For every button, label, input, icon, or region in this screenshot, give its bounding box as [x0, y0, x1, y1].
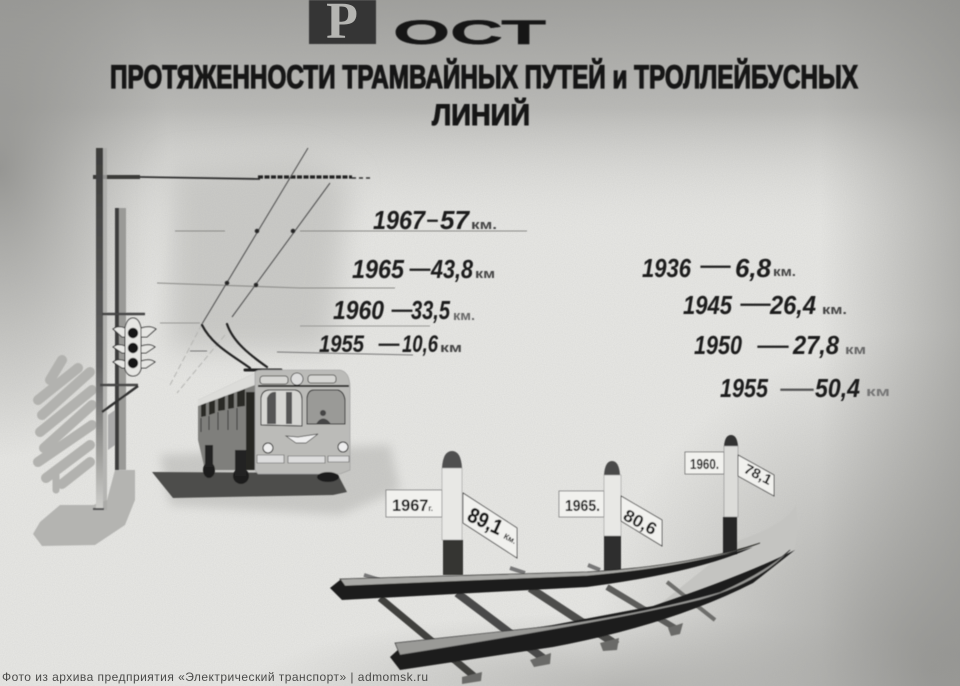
1945 value	[683, 290, 847, 320]
illustration: rails	[330, 543, 795, 670]
lower rail	[390, 550, 795, 670]
illustration: railway ties	[364, 505, 797, 684]
title word: ОСТ	[393, 14, 546, 52]
1955 value	[319, 331, 462, 358]
1960 value: 33,5	[411, 295, 450, 325]
1945 value: 1945	[683, 290, 732, 320]
bus grille and headlights	[286, 434, 318, 443]
1936 value: 1936	[642, 253, 691, 283]
wheels	[203, 462, 215, 478]
data list: trolleybus lines	[319, 205, 497, 358]
trolley poles	[202, 324, 281, 370]
1960 value: 1960	[333, 295, 384, 325]
1965 value: 1965	[352, 254, 404, 284]
bus front	[255, 370, 350, 474]
1967 value: 57	[440, 205, 471, 235]
upper rail	[330, 543, 760, 600]
1945 value: 26,4	[769, 290, 816, 320]
milepost 1960: 1960.	[690, 456, 719, 473]
1965 value: —	[410, 261, 430, 278]
1936 value	[642, 253, 796, 283]
side windows	[201, 389, 245, 417]
milepost 1960	[685, 435, 775, 554]
1960 value: —	[392, 302, 412, 319]
1967 value	[373, 205, 497, 235]
bus side	[198, 373, 258, 470]
mileposts	[386, 435, 775, 575]
1950 value: 27,8	[792, 330, 839, 360]
illustration: trolleybus	[152, 324, 350, 498]
windscreen	[261, 390, 302, 426]
1950 value	[694, 330, 866, 360]
1960 value	[333, 295, 475, 325]
1967 value: –	[427, 212, 438, 229]
milepost 1960: 78,1	[742, 460, 775, 488]
1950 value: км	[845, 342, 866, 357]
milepost 1967: Км.	[502, 532, 518, 546]
illustration: poles	[93, 148, 145, 510]
title	[110, 0, 858, 132]
milepost 1967: 1967г.	[392, 496, 433, 515]
illustration: overhead wires	[93, 148, 527, 393]
icon: traffic light	[113, 318, 156, 376]
title initial letter block	[309, 0, 376, 50]
1950 value: 1950	[694, 330, 742, 360]
subtitle line two: ЛИНИЙ	[432, 98, 530, 132]
1945 value: —	[741, 296, 770, 313]
1945 value: км.	[822, 302, 847, 317]
milepost 1967: 89,1	[464, 504, 506, 540]
1967 value: 1967	[373, 205, 426, 235]
1955 value: 10,6	[402, 331, 438, 358]
1955 value: км	[866, 384, 890, 399]
data list: tram tracks	[642, 253, 890, 403]
1955 value	[720, 373, 890, 403]
1936 value: —	[701, 258, 730, 275]
milepost 1965: 1965.	[565, 498, 600, 515]
milepost 1965: 80,6	[620, 506, 660, 539]
1955 value: км	[440, 340, 462, 355]
1955 value: —	[781, 381, 813, 398]
1955 value: 1955	[720, 373, 768, 403]
1936 value: км.	[773, 264, 796, 279]
photo credit: Фото из архива предприятия «Электрический транспорт» | admomsk.ru	[2, 670, 428, 684]
1960 value: км.	[453, 308, 475, 323]
milepost 1965	[559, 461, 662, 571]
1955 value: 50,4	[815, 373, 860, 403]
1936 value: 6,8	[735, 253, 772, 283]
1965 value: 43,8	[430, 254, 473, 284]
1955 value: —	[379, 336, 399, 353]
1950 value: —	[758, 338, 788, 355]
illustration: tree wash and pole base	[33, 360, 135, 546]
1955 value: 1955	[319, 331, 365, 358]
1967 value: км.	[471, 217, 497, 232]
1965 value	[352, 254, 495, 284]
road shadow	[152, 472, 347, 498]
1965 value: км	[475, 266, 495, 281]
milepost 1967	[386, 451, 518, 575]
